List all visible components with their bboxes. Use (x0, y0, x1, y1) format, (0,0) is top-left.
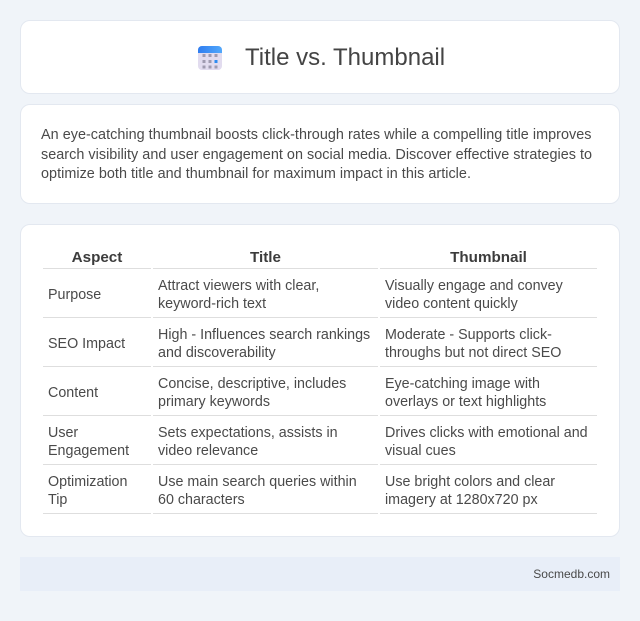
table header row (72, 249, 527, 266)
row: Optimization Tip: 60 characters (158, 492, 245, 508)
row: Optimization Tip: Tip (48, 492, 67, 508)
row: Content: primary keywords (158, 394, 270, 410)
row: Optimization Tip: Use main search queries within (158, 474, 357, 490)
row: SEO Impact: throughs but not direct SEO (385, 345, 561, 361)
heading: Thumbnail: Thumbnail (450, 249, 527, 266)
row: Content: Eye-catching image with (385, 376, 540, 392)
row: User Engagement: Engagement (48, 443, 129, 459)
row: Optimization Tip: Optimization (48, 474, 127, 490)
text block: introduction: optimize both title and thumbnail for maximum impact in this article. (41, 166, 471, 182)
row: Purpose: keyword-rich text (158, 296, 266, 312)
text block: introduction: search visibility and user engagement on social media. Discover effective strategies to (41, 146, 592, 162)
text block: introduction: An eye-catching thumbnail boosts click-through rates while a compelling title improves (41, 127, 592, 143)
row: SEO Impact: High - Influences search rankings (158, 327, 370, 343)
row: User Engagement: Sets expectations, assists in (158, 425, 338, 441)
row: User Engagement: User (48, 425, 78, 441)
row: Purpose (48, 278, 563, 312)
row: Purpose: Purpose (48, 287, 101, 303)
row: User Engagement (48, 425, 588, 459)
row: User Engagement: video relevance (158, 443, 258, 459)
row: SEO Impact: Moderate - Supports click- (385, 327, 552, 343)
footer bar (20, 557, 620, 591)
row: Optimization Tip (48, 474, 555, 508)
row: SEO Impact (48, 327, 561, 361)
row: Purpose: video content quickly (385, 296, 518, 312)
row: Content: Content (48, 385, 98, 401)
row: Optimization Tip: Use bright colors and clear (385, 474, 555, 490)
row: Purpose: Visually engage and convey (385, 278, 563, 294)
row: User Engagement: Drives clicks with emotional and (385, 425, 588, 441)
footer text: Socmedb.com: Socmedb.com (533, 567, 610, 581)
row: Purpose: Attract viewers with clear, (158, 278, 319, 294)
heading: Title: Title (250, 249, 281, 266)
text block: introduction (41, 127, 592, 182)
panel: comparison table (20, 224, 620, 537)
title: Title vs. Thumbnail (245, 44, 445, 71)
row: Optimization Tip: imagery at 1280x720 px (385, 492, 538, 508)
panel: introduction (20, 104, 620, 204)
row: User Engagement: visual cues (385, 443, 456, 459)
row: Content: overlays or text highlights (385, 394, 546, 410)
icon: calendar (198, 46, 222, 70)
row: SEO Impact: and discoverability (158, 345, 276, 361)
heading: Aspect: Aspect (72, 249, 122, 266)
row: Content: Concise, descriptive, includes (158, 376, 346, 392)
panel: header (20, 20, 620, 94)
row: SEO Impact: SEO Impact (48, 336, 125, 352)
row: Content (48, 376, 546, 410)
